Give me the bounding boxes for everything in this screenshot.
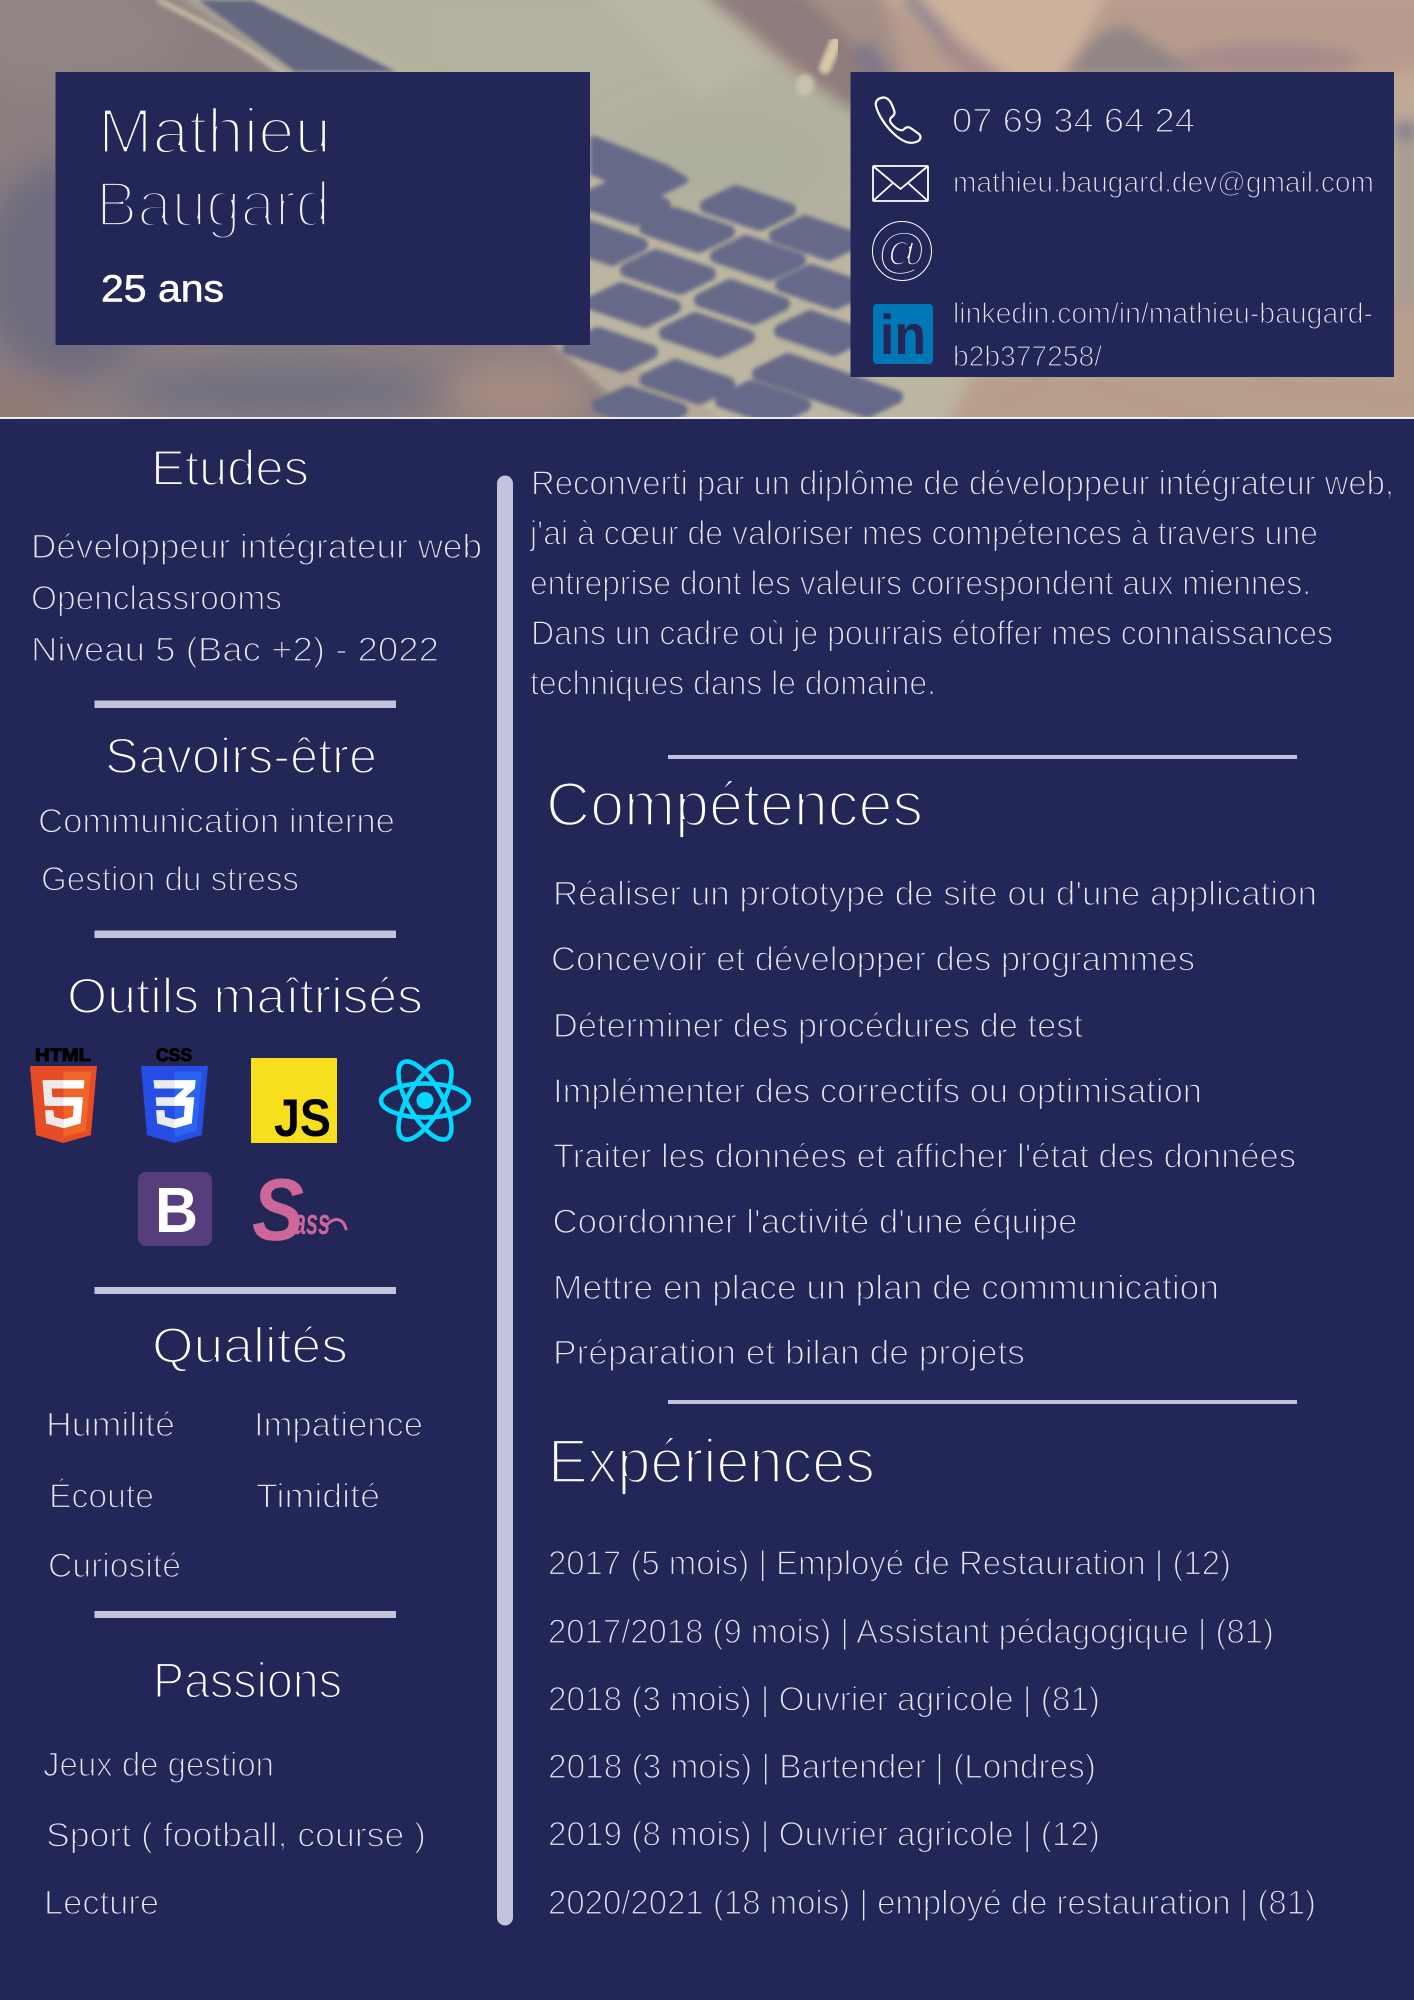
savoirs-etre list: Communication interne <box>38 802 395 840</box>
experiences list: 2017/2018 (9 mois) | Assistant pédagogique | (81) <box>548 1613 1274 1651</box>
email address: mathieu.baugard.dev@gmail.com <box>953 167 1374 199</box>
savoirs-etre list <box>38 802 395 899</box>
qualites list <box>46 1406 423 1585</box>
linkedin url <box>953 298 1373 373</box>
passions list: Jeux de gestion <box>43 1746 274 1784</box>
passions list <box>43 1746 426 1922</box>
competences list: Concevoir et développer des programmes <box>551 940 1195 978</box>
first name: Mathieu <box>98 95 331 167</box>
section: outils maitrises <box>30 968 469 1259</box>
competences list <box>551 875 1317 1372</box>
heading: competences: Compétences <box>546 770 923 840</box>
intro paragraph: techniques dans le domaine. <box>530 664 936 702</box>
heading: passions: Passions <box>153 1652 342 1708</box>
qualites list: Écoute <box>49 1477 154 1515</box>
competences list: Mettre en place un plan de communication <box>553 1269 1219 1307</box>
experiences list: 2020/2021 (18 mois) | employé de restauration | (81) <box>548 1884 1316 1922</box>
etudes details: Développeur intégrateur web <box>31 528 482 566</box>
icon: bootstrap <box>138 1172 212 1246</box>
passions list: Lecture <box>44 1884 159 1922</box>
phone number: 07 69 34 64 24 <box>952 102 1195 140</box>
intro paragraph: j'ai à cœur de valoriser mes compétences à travers une <box>529 515 1318 553</box>
qualites list: Timidité <box>256 1477 380 1515</box>
section: passions <box>43 1652 426 1922</box>
icon: css3: CSS <box>156 1045 192 1065</box>
experiences list <box>548 1544 1316 1922</box>
icon: html5 <box>30 1045 97 1143</box>
experiences list: 2018 (3 mois) | Ouvrier agricole | (81) <box>548 1680 1100 1718</box>
icon: css3 <box>141 1045 208 1143</box>
savoirs-etre list: Gestion du stress <box>41 861 299 899</box>
icon: sass <box>252 1160 346 1259</box>
intro paragraph: Reconverti par un diplôme de développeur intégrateur web, <box>531 464 1394 502</box>
heading: qualites: Qualités <box>152 1318 348 1374</box>
qualites list: Curiosité <box>48 1547 181 1585</box>
passions list: Sport ( football, course ) <box>46 1816 426 1854</box>
experiences list: 2019 (8 mois) | Ouvrier agricole | (12) <box>548 1815 1100 1853</box>
heading: outils maitrises: Outils maîtrisés <box>67 968 423 1024</box>
icon: javascript <box>251 1058 337 1148</box>
competences list: Réaliser un prototype de site ou d'une application <box>553 875 1317 913</box>
competences list: Implémenter des correctifs ou optimisation <box>553 1072 1202 1110</box>
qualites list: Impatience <box>254 1406 423 1444</box>
panel: left column <box>30 440 482 1922</box>
icon: phone <box>876 97 920 143</box>
icon: bootstrap: B <box>155 1174 198 1246</box>
intro paragraph: Dans un cadre où je pourrais étoffer mes connaissances <box>531 614 1333 652</box>
experiences list: 2017 (5 mois) | Employé de Restauration | (12) <box>548 1544 1231 1582</box>
section: experiences <box>548 1428 1316 1922</box>
section: savoirs-etre <box>38 728 395 899</box>
icon: react <box>381 1054 469 1147</box>
competences list: Traiter les données et afficher l'état des données <box>553 1137 1296 1175</box>
competences list: Coordonner l'activité d'une équipe <box>552 1203 1078 1241</box>
panel: right column <box>529 464 1394 1922</box>
contact panel <box>850 72 1394 377</box>
vertical column divider <box>497 476 513 1926</box>
last name: Baugard <box>96 168 330 240</box>
icon: sass: S <box>252 1160 304 1259</box>
icon: html5: HTML <box>35 1045 91 1065</box>
experiences list: 2018 (3 mois) | Bartender | (Londres) <box>548 1748 1096 1786</box>
icon: javascript: JS <box>274 1089 331 1148</box>
competences list: Déterminer des procédures de test <box>553 1007 1084 1045</box>
icon: sass: ass <box>294 1201 330 1242</box>
intro paragraph: entreprise dont les valeurs correspondent aux miennes. <box>530 564 1311 602</box>
linkedin url: b2b377258/ <box>953 341 1103 373</box>
etudes details: Niveau 5 (Bac +2) - 2022 <box>31 631 439 669</box>
section: etudes <box>31 440 482 669</box>
section: competences <box>546 770 1317 1372</box>
competences list: Préparation et bilan de projets <box>553 1334 1025 1372</box>
header separator line <box>0 417 1414 419</box>
heading: savoirs-etre: Savoirs-être <box>105 728 377 784</box>
heading: etudes: Etudes <box>151 440 309 496</box>
icon: envelope <box>873 166 928 201</box>
icon: linkedin: in <box>880 303 926 366</box>
linkedin url: linkedin.com/in/mathieu-baugard- <box>953 298 1373 330</box>
section: qualites <box>46 1318 423 1585</box>
etudes details <box>31 528 482 669</box>
heading: experiences: Expériences <box>548 1428 875 1497</box>
etudes details: Openclassrooms <box>31 580 282 618</box>
icon: at sign: @ <box>877 223 927 279</box>
age: 25 ans <box>101 269 224 311</box>
name panel <box>56 72 590 345</box>
header photo: laptop keyboard and hands <box>0 0 1414 430</box>
intro paragraph <box>529 464 1394 702</box>
qualites list: Humilité <box>46 1406 175 1444</box>
